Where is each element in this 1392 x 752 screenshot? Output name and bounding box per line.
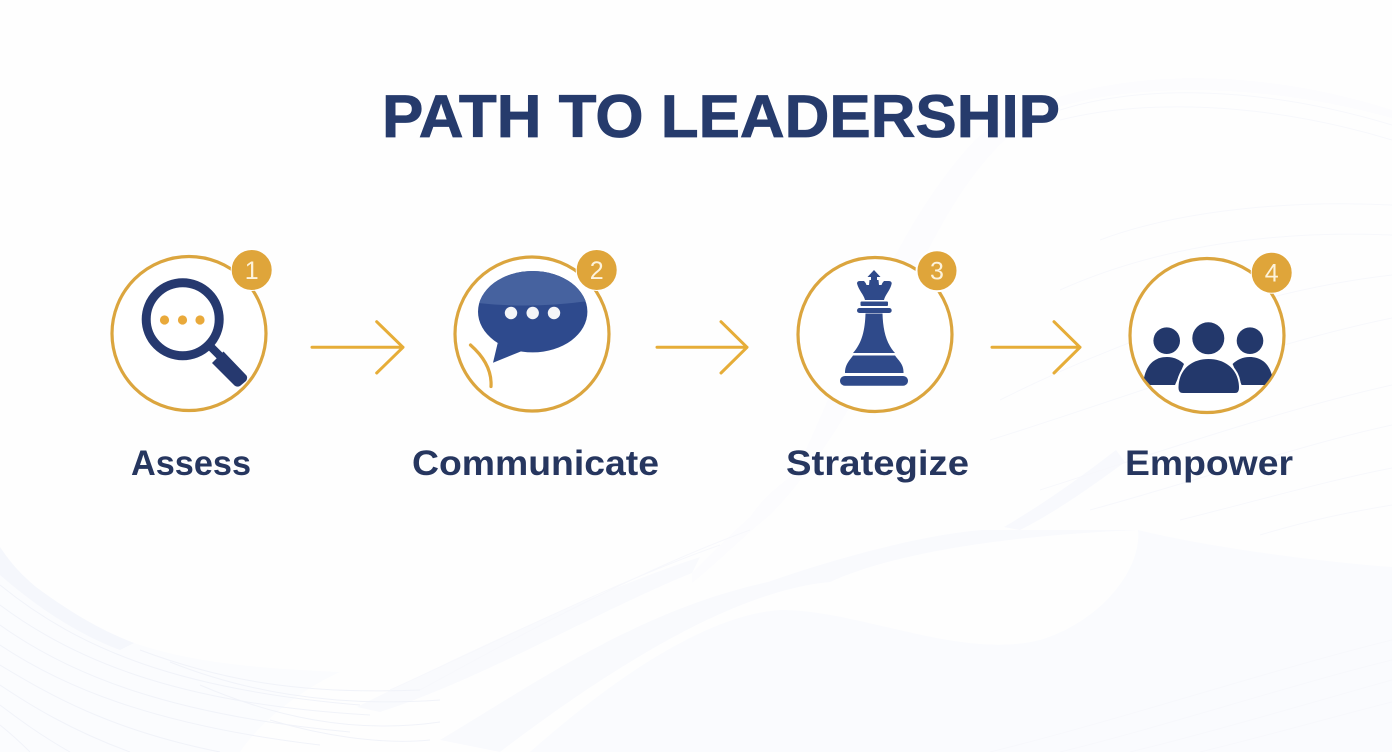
title: PATH TO LEADERSHIP (382, 83, 1060, 150)
ring 3 (798, 258, 952, 412)
step 3: strategize (786, 250, 969, 483)
ring 1 (112, 256, 266, 410)
step 1: assess (112, 250, 272, 483)
badge 1: 1 (245, 257, 259, 285)
arrow 3 (992, 322, 1080, 373)
icon: group of people (1144, 322, 1273, 393)
badge 2: 2 (590, 257, 604, 285)
arrow 1 (312, 322, 403, 373)
icon: magnifying glass (146, 283, 247, 387)
badge 3 (916, 250, 958, 291)
arrow 2 (657, 322, 747, 373)
step 2: communicate (412, 250, 659, 483)
badge 3: 3 (930, 258, 944, 286)
icon: chess queen (840, 270, 908, 386)
label: Assess: Assess (131, 444, 251, 483)
badge 2 (576, 250, 617, 290)
badge 4: 4 (1265, 260, 1279, 288)
label: Empower: Empower (1125, 444, 1293, 483)
label: Strategize: Strategize (786, 444, 969, 483)
step 4: empower (1125, 252, 1293, 483)
ring 2 (455, 257, 609, 411)
label: Communicate: Communicate (412, 444, 659, 483)
icon: speech bubble (470, 265, 595, 386)
ring 4 (1130, 258, 1284, 412)
badge 1 (231, 250, 272, 290)
badge 4 (1251, 252, 1292, 293)
